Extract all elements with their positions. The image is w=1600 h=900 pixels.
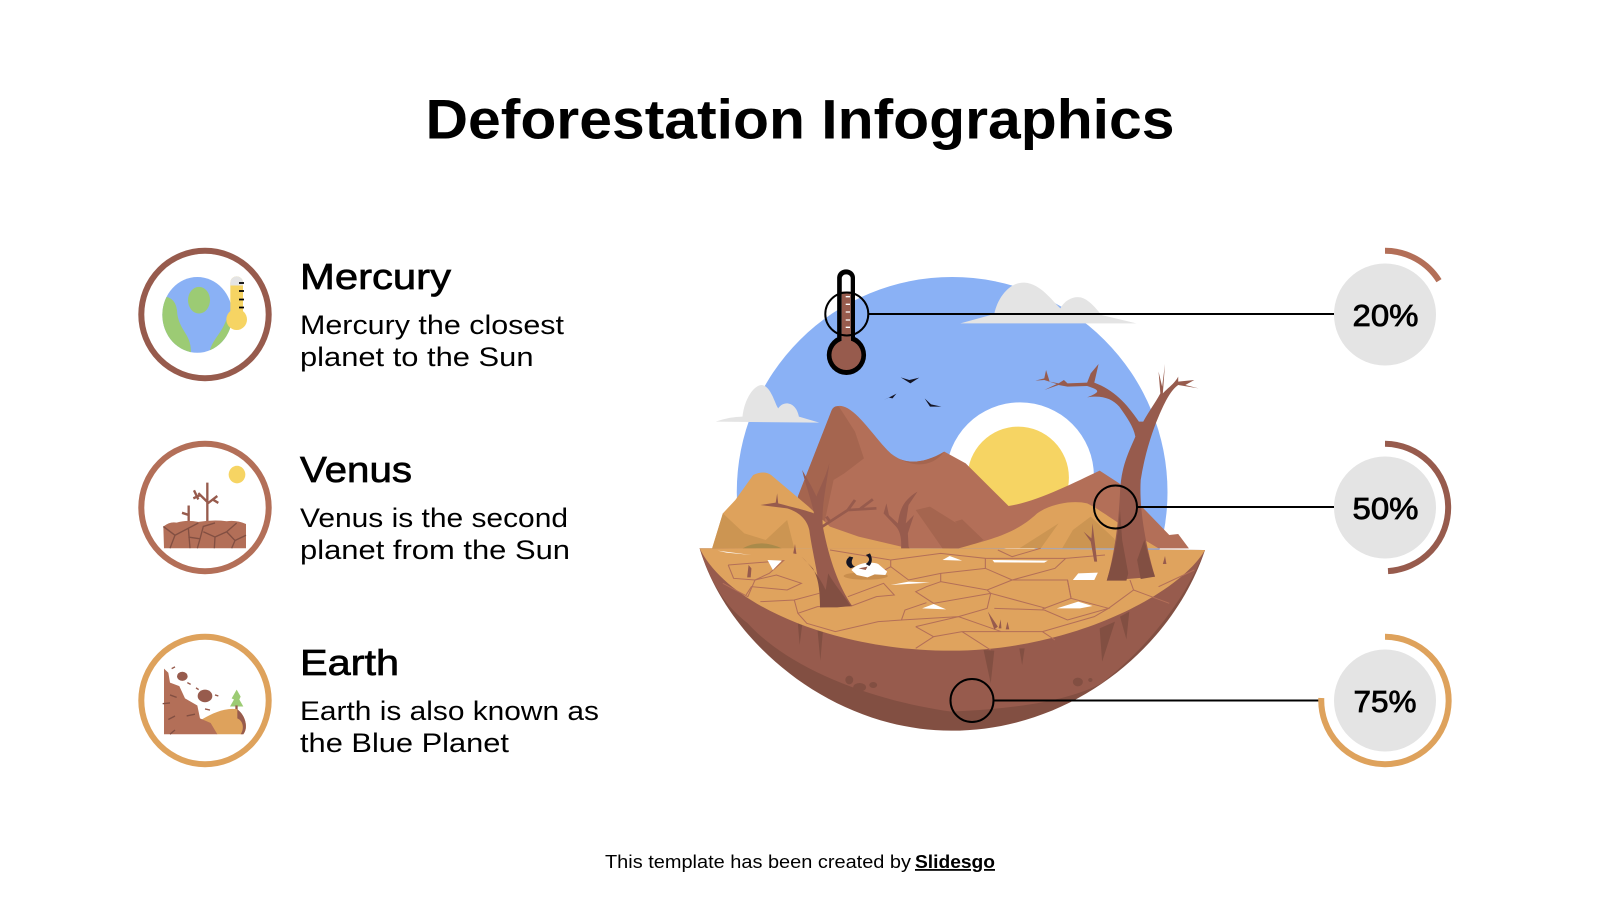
clouds [716, 283, 1136, 423]
dead tree: right [1035, 364, 1199, 581]
text: Earth description [300, 696, 599, 758]
callout marker and line: temperature [825, 292, 1334, 336]
gauge: 75%: 75% [1354, 684, 1416, 719]
callout marker and line: tree [1094, 486, 1334, 528]
sky disc [737, 277, 1167, 707]
text: Mercury description: planet to the Sun [300, 342, 534, 372]
heading: Venus: Venus [300, 449, 412, 490]
gauge: 50% [1334, 444, 1448, 571]
text: Mercury description [300, 310, 565, 372]
panel: Mercury [141, 251, 565, 378]
heading: Mercury: Mercury [300, 256, 451, 297]
sun [946, 402, 1094, 550]
text: Earth description: Earth is also known as [300, 696, 599, 726]
heading: Earth: Earth [300, 642, 399, 683]
text: Earth description: the Blue Planet [300, 728, 510, 758]
mountains [712, 406, 1189, 548]
panel: Venus [141, 444, 570, 571]
text: Mercury description: Mercury the closest [300, 310, 565, 340]
icon: landslide [163, 667, 246, 734]
skull [844, 553, 888, 580]
illustration: deforested landscape [700, 269, 1205, 731]
callout marker and line: soil [950, 679, 1320, 722]
icon ring: Mercury [141, 251, 269, 378]
footer credit: Slidesgo [915, 852, 995, 872]
panel: Earth [141, 637, 599, 764]
title: Deforestation Infographics [426, 88, 1174, 150]
text: Venus description: planet from the Sun [300, 535, 570, 565]
icon: dry soil [163, 466, 246, 548]
text: Venus description: Venus is the second [300, 503, 568, 533]
small tree [884, 492, 917, 558]
thermometer [827, 269, 866, 375]
bowl of earth [700, 548, 1205, 731]
icon ring: Venus [141, 444, 269, 571]
dead tree: left [760, 463, 876, 607]
gauge: 50%: 50% [1352, 491, 1418, 526]
gauge: 20% [1334, 251, 1439, 366]
icon ring: Earth [141, 637, 269, 764]
birds [884, 377, 941, 407]
text: Venus description [300, 503, 570, 565]
icon: warming globe [157, 276, 247, 355]
gauge: 75% [1321, 637, 1449, 764]
gauge: 20%: 20% [1352, 298, 1418, 333]
footer credit: This template has been created by [605, 852, 911, 872]
cracked ground [700, 523, 1205, 651]
